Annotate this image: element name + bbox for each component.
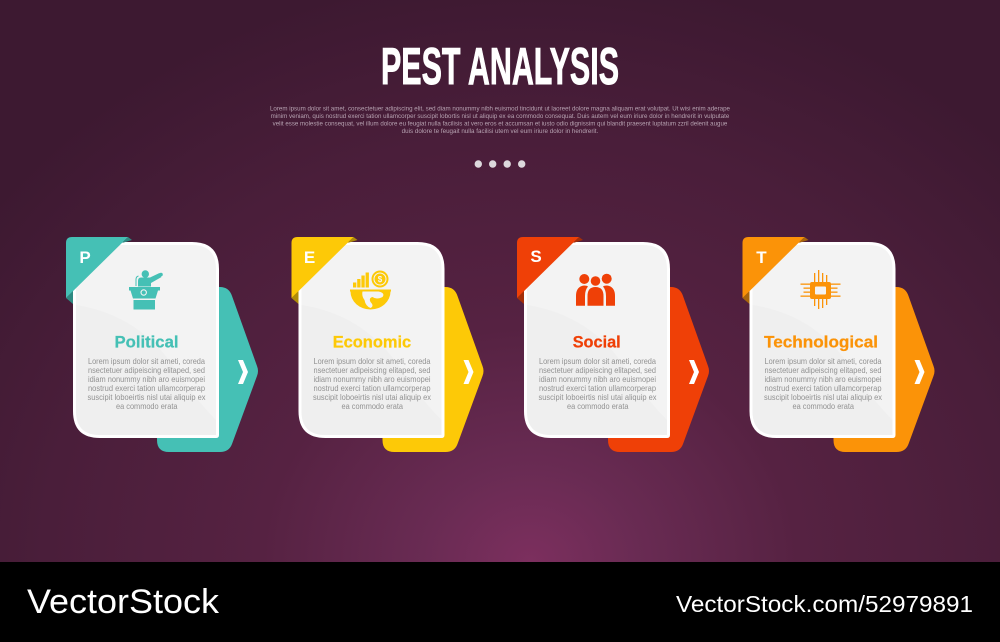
chevron	[464, 360, 474, 384]
intro text block	[270, 106, 731, 135]
card	[526, 244, 668, 436]
body text: ea commodo erata	[567, 402, 629, 411]
footer band	[0, 562, 1000, 642]
tab letter: P	[79, 248, 91, 267]
tab fold	[742, 237, 808, 304]
heading: Political	[114, 334, 178, 352]
body text	[764, 357, 882, 411]
body text: nsectetuer adipeiscing elitaped, sed	[88, 366, 205, 375]
tab P	[66, 237, 128, 298]
panel: technological	[742, 237, 934, 452]
tab letter: E	[304, 248, 315, 267]
tab letter: S	[530, 247, 542, 266]
chevron	[238, 360, 248, 384]
panel: economic	[292, 237, 484, 452]
panel: social	[517, 237, 709, 452]
body text: suscipit loboeirtis nisl utai aliquip ex	[313, 393, 431, 402]
heading: Technological	[764, 334, 878, 352]
body text: suscipit loboeirtis nisl utai aliquip ex	[764, 393, 882, 402]
tab T	[742, 237, 804, 298]
tab fold	[517, 237, 583, 304]
body text: idiam nonummy nibh aro euismopei	[764, 375, 882, 384]
body text: ea commodo erata	[116, 402, 178, 411]
chevron	[689, 360, 699, 384]
tab fold	[66, 237, 132, 304]
pagination dots	[475, 160, 525, 168]
chevron	[914, 360, 924, 384]
body text: nostrud exerci tation ullamcorperap	[314, 384, 431, 393]
body text: Lorem ipsum dolor sit ameti, coreda	[764, 357, 882, 366]
icon: microchip	[800, 270, 840, 309]
card	[300, 244, 443, 436]
title: PEST ANALYSIS	[381, 38, 619, 96]
arrow shape	[608, 287, 709, 452]
body text: ea commodo erata	[792, 402, 855, 411]
body text: nostrud exerci tation ullamcorperap	[88, 384, 206, 393]
icon: group of people	[576, 274, 615, 306]
body text: idiam nonummy nibh aro euismopei	[314, 375, 431, 384]
body text: Lorem ipsum dolor sit ameti, coreda	[88, 357, 205, 366]
intro text block: Lorem ipsum dolor sit amet, consectetuer adipiscing elit, sed diam nonummy nibh euismod tincidunt ut laoreet dolore magna aliquam erat volutpat. Ut wisi enim aderape	[270, 106, 731, 112]
intro text block: duis dolore te feugait nulla facilisi utem vel eum iriure dolor in hendrerit.	[402, 129, 599, 135]
body text: idiam nonummy nibh aro euismopei	[88, 375, 205, 384]
arrow shape	[157, 287, 258, 452]
heading: Economic	[333, 334, 411, 352]
arrow shape	[382, 287, 484, 452]
body text: Lorem ipsum dolor sit ameti, coreda	[539, 357, 656, 366]
brand wordmark: VectorStock	[27, 583, 220, 621]
body text: idiam nonummy nibh aro euismopei	[539, 375, 656, 384]
intro text block: velit esse molestie consequat, vel illum dolore eu feugiat nulla facilisis at vero eros et accumsan et iusto odio dignissim qui blandit praesent luptatum zzril delenit augue	[273, 122, 728, 128]
tab S	[517, 237, 579, 298]
panel: political	[66, 237, 258, 452]
heading: Social	[573, 334, 621, 352]
body text	[88, 357, 206, 411]
body text: suscipit loboeirtis nisl utai aliquip ex	[88, 393, 206, 402]
body text: nostrud exerci tation ullamcorperap	[539, 384, 657, 393]
body text: nostrud exerci tation ullamcorperap	[764, 384, 882, 393]
arrow shape	[834, 287, 934, 452]
icon: globe and coin: $	[378, 275, 383, 284]
body text	[538, 357, 657, 411]
icon: speaker at podium	[129, 270, 163, 310]
body text: nsectetuer adipeiscing elitaped, sed	[764, 366, 882, 375]
image id: VectorStock.com/52979891	[676, 591, 973, 617]
card	[751, 244, 894, 436]
body text: Lorem ipsum dolor sit ameti, coreda	[314, 357, 431, 366]
icon: globe and coin	[350, 270, 391, 310]
body text	[313, 357, 431, 411]
tab fold	[292, 237, 358, 304]
body text: ea commodo erata	[342, 402, 404, 411]
tab E	[292, 237, 354, 298]
intro text block: minim veniam, quis nostrud exerci tation ullamcorper suscipit lobortis nisl ut aliquip ex ea commodo consequat. Duis autem vel eum iriure dolor in hendrerit in vulputate	[271, 114, 730, 120]
body text: suscipit loboeirtis nisl utai aliquip ex	[538, 393, 656, 402]
card	[74, 244, 218, 436]
tab letter: T	[756, 248, 767, 267]
body text: nsectetuer adipeiscing elitaped, sed	[314, 366, 430, 375]
body text: nsectetuer adipeiscing elitaped, sed	[539, 366, 656, 375]
